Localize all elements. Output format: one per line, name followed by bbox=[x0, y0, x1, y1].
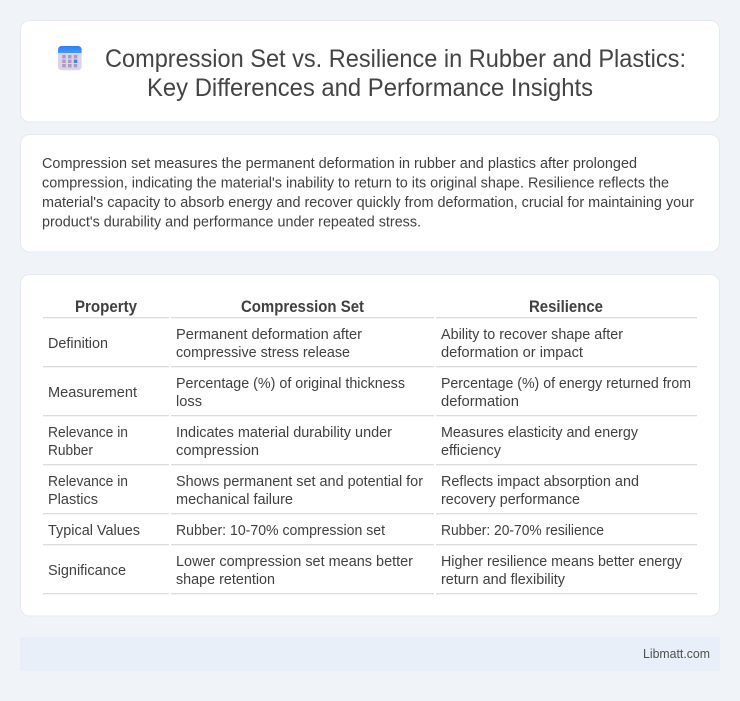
table header row bbox=[43, 298, 697, 318]
icon: calendar bbox=[58, 46, 82, 70]
row: typical values: Rubber: 20-70% resilience bbox=[441, 523, 604, 539]
row: significance: shape retention bbox=[176, 572, 275, 588]
row: relevance in plastics: mechanical failure bbox=[176, 492, 293, 508]
panel: header bbox=[20, 20, 720, 122]
row: relevance in rubber bbox=[43, 425, 697, 465]
row: measurement: loss bbox=[176, 394, 202, 410]
row: definition: Definition bbox=[48, 336, 108, 352]
text block: summary paragraph bbox=[42, 156, 694, 230]
row: relevance in plastics bbox=[43, 474, 697, 514]
title bbox=[105, 45, 686, 102]
table header row: Property bbox=[75, 298, 138, 316]
row: significance: Lower compression set means better bbox=[176, 554, 413, 570]
row: definition: deformation or impact bbox=[441, 345, 583, 361]
row: definition: compressive stress release bbox=[176, 345, 350, 361]
row: measurement: Percentage (%) of energy returned from bbox=[441, 376, 691, 392]
row: relevance in plastics: Reflects impact absorption and bbox=[441, 474, 639, 490]
row: relevance in plastics: Shows permanent set and potential for bbox=[176, 474, 423, 490]
row: relevance in plastics: recovery performance bbox=[441, 492, 580, 508]
text block: summary paragraph: product's durability and performance under repeated stress. bbox=[42, 214, 421, 230]
row: relevance in rubber: compression bbox=[176, 443, 259, 459]
row: significance: return and flexibility bbox=[441, 572, 566, 588]
text block: summary paragraph: Compression set measures the permanent deformation in rubber and plastics after prolonged bbox=[42, 156, 637, 172]
row: typical values: Typical Values bbox=[48, 523, 140, 539]
row: relevance in rubber: Indicates material durability under bbox=[176, 425, 392, 441]
row: relevance in rubber: efficiency bbox=[441, 443, 502, 459]
row: measurement: Percentage (%) of original thickness bbox=[176, 376, 405, 392]
row: significance bbox=[43, 554, 697, 594]
panel: introduction bbox=[20, 134, 720, 252]
row: significance: Higher resilience means better energy bbox=[441, 554, 683, 570]
title: Compression Set vs. Resilience in Rubber and Plastics: bbox=[105, 45, 686, 73]
row: definition: Ability to recover shape after bbox=[441, 327, 623, 343]
table header row: Compression Set bbox=[241, 298, 364, 316]
row: measurement bbox=[43, 376, 697, 416]
row: relevance in rubber: Rubber bbox=[48, 443, 93, 459]
table header row: Resilience bbox=[529, 298, 603, 316]
row: definition: Permanent deformation after bbox=[176, 327, 362, 343]
row: measurement: Measurement bbox=[48, 385, 137, 401]
row: definition bbox=[43, 327, 697, 367]
row: relevance in rubber: Relevance in bbox=[48, 425, 128, 441]
row: significance: Significance bbox=[48, 563, 126, 579]
text block: summary paragraph: compression, indicating the material's inability to return to its original shape. Resilience reflects the bbox=[42, 176, 669, 192]
text block: summary paragraph: material's capacity to absorb energy and recover quickly from deformation, crucial for maintaining your bbox=[42, 195, 694, 211]
row: relevance in plastics: Plastics bbox=[48, 492, 98, 508]
row: typical values bbox=[43, 523, 697, 545]
row: relevance in rubber: Measures elasticity and energy bbox=[441, 425, 639, 441]
title: Key Differences and Performance Insights bbox=[147, 74, 593, 102]
footer credit: Libmatt.com bbox=[643, 646, 710, 661]
row: measurement: deformation bbox=[441, 394, 519, 410]
panel: comparison table bbox=[20, 274, 720, 616]
footer bar bbox=[20, 637, 720, 671]
row: relevance in plastics: Relevance in bbox=[48, 474, 128, 490]
row: typical values: Rubber: 10-70% compression set bbox=[176, 523, 385, 539]
